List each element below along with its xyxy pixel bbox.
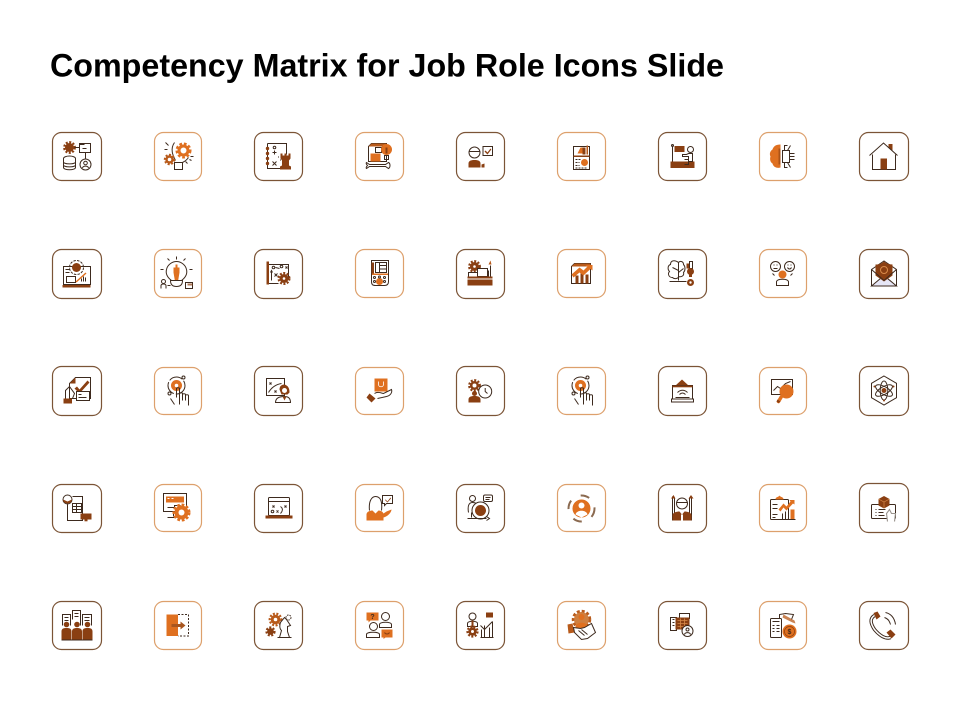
icon: woman with speech bubble [356,484,404,532]
icon: gears and chess knight [254,602,302,650]
icon: database network [52,132,102,180]
title: Competency Matrix for Job Role Icons Slide [50,48,724,84]
icon: calculator and dollar coin [760,602,806,650]
icon: chart with magnifier [760,368,806,414]
icon: box with hand [860,484,908,532]
icon: brain tree and bulb [658,250,706,298]
icon: strategy notebook with rook [254,132,302,180]
icon: calculator form [356,250,404,298]
icon: laptop with gear [52,250,102,298]
icon: team and buildings [52,602,102,650]
icon: laptop with house roof [658,366,706,416]
icon: bulb with gears [154,132,202,180]
icon: monitor with gear [154,484,202,532]
icon: home [860,132,908,180]
icon: shopping bag on hand [356,368,404,414]
icon: checklist in hand [52,366,102,416]
icon: presenter with flag [658,132,706,180]
icon: touch target two [558,368,606,414]
icon: strategy map with gear [254,250,302,298]
icon: envelope with shield [860,250,908,298]
icon: door exit arrow [154,602,202,650]
icon: two people with chat: ? [370,614,375,621]
icon: businessman with arrows [658,484,706,532]
icon: idea bulb with hand [154,250,202,298]
icon: analyst with gear and chart [456,602,504,650]
icon: report with chart [558,132,606,180]
icon: coach with tactic board [254,366,302,416]
icon: document bulb wrench [356,132,404,180]
icon: calculator and dollar coin: $ [788,629,792,636]
icon: user with gear and clock [456,366,504,416]
icon: network head document computer [52,484,102,532]
icon: grid card and user [658,602,706,650]
icon: laptop with tactic plan [254,484,302,532]
icon: person with target and chat [456,484,504,532]
icon: person with two moods [760,250,806,298]
icon: person in arrows [558,484,606,532]
icon: growth chart document [558,250,606,298]
icon: atom hexagon [860,366,908,416]
icon: desk with gear and chart [456,250,504,298]
icon: phone call [860,602,908,650]
icon: clipboard with growth bars [760,484,806,532]
icon: brain circuit [760,132,806,180]
icon: touch target [154,368,202,414]
icon: two people with chat [356,602,404,650]
icon: user with approval chat [456,132,504,180]
icon: handshake with gear [558,602,606,650]
